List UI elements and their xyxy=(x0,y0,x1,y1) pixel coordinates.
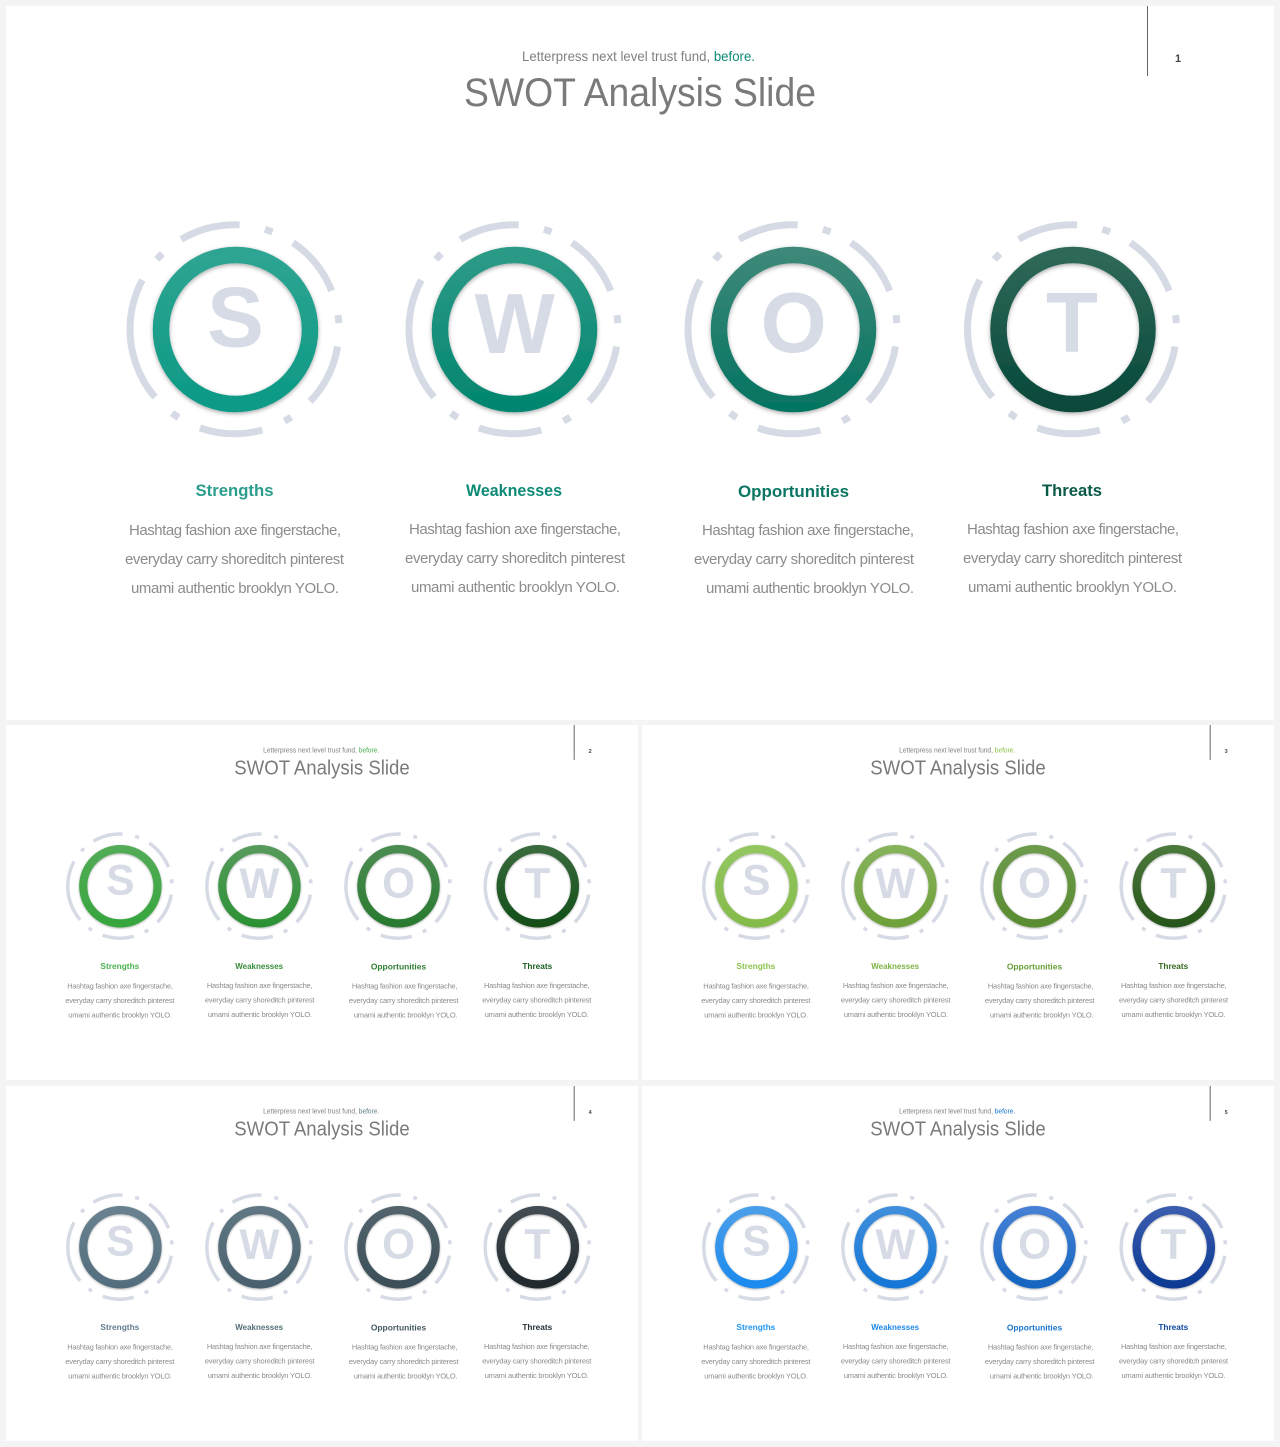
page number: 1 xyxy=(1175,53,1181,65)
text: Strengths: everyday carry shoreditch pinterest xyxy=(65,1357,175,1366)
ring: W xyxy=(207,834,311,938)
text: Weaknesses: umami authentic brooklyn YOLO. xyxy=(844,1371,948,1380)
text: Weaknesses: umami authentic brooklyn YOLO. xyxy=(844,1010,948,1019)
ring: W: W xyxy=(876,1221,916,1268)
heading: Threats: Threats xyxy=(522,961,553,971)
text: Opportunities xyxy=(985,1343,1095,1381)
text: Opportunities: umami authentic brooklyn YOLO. xyxy=(990,1011,1094,1020)
heading: Weaknesses: Weaknesses xyxy=(871,1322,919,1332)
text: Threats xyxy=(963,521,1183,596)
heading: Weaknesses: Weaknesses xyxy=(235,1322,283,1332)
text: Weaknesses: Hashtag fashion axe fingerstache, xyxy=(843,1342,949,1351)
ring: W: W xyxy=(876,860,916,907)
text: Threats xyxy=(1119,981,1229,1019)
text: Strengths: Hashtag fashion axe fingerstache, xyxy=(703,1343,809,1352)
text: Weaknesses xyxy=(841,981,951,1019)
text: Threats: everyday carry shoreditch pinterest xyxy=(1119,1357,1229,1366)
text: Opportunities: everyday carry shoreditch pinterest xyxy=(985,1357,1095,1366)
subtitle: Letterpress next level trust fund, before. xyxy=(522,48,755,64)
ring: O xyxy=(688,225,897,434)
text: Threats: Hashtag fashion axe fingerstache, xyxy=(484,1342,590,1351)
text: Threats xyxy=(1119,1342,1229,1380)
heading: Strengths: Strengths xyxy=(196,481,274,500)
ring: T xyxy=(1121,1195,1225,1299)
ring: S: S xyxy=(106,1218,135,1265)
ring: O: O xyxy=(761,276,827,371)
text: Opportunities: Hashtag fashion axe fingerstache, xyxy=(352,1343,458,1352)
text: Weaknesses: Hashtag fashion axe fingerstache, xyxy=(409,521,621,538)
heading: Opportunities: Opportunities xyxy=(371,1323,426,1333)
text: Threats: Hashtag fashion axe fingerstache, xyxy=(1121,1342,1227,1351)
heading: Opportunities: Opportunities xyxy=(1007,1323,1062,1333)
ring: O xyxy=(346,1195,450,1299)
text: Threats: umami authentic brooklyn YOLO. xyxy=(1121,1010,1226,1019)
heading: Weaknesses: Weaknesses xyxy=(871,961,919,971)
text: Opportunities: umami authentic brooklyn YOLO. xyxy=(990,1372,1094,1381)
text: Opportunities: Hashtag fashion axe fingerstache, xyxy=(702,522,914,539)
ring: T xyxy=(485,1195,589,1299)
subtitle: Letterpress next level trust fund, before. xyxy=(263,747,379,754)
panel: slide 4 slate xyxy=(6,1086,638,1441)
text: Weaknesses xyxy=(205,981,315,1019)
text: Strengths: umami authentic brooklyn YOLO. xyxy=(704,1372,808,1381)
text: Threats: Hashtag fashion axe fingerstache, xyxy=(967,521,1179,538)
heading: Weaknesses: Weaknesses xyxy=(235,961,283,971)
text: Threats: everyday carry shoreditch pinterest xyxy=(482,996,592,1005)
page number divider xyxy=(1209,725,1212,760)
subtitle: Letterpress next level trust fund, before. xyxy=(263,1108,379,1115)
text: Strengths: everyday carry shoreditch pinterest xyxy=(701,996,811,1005)
panel: slide 5 blue xyxy=(642,1086,1274,1441)
text: Strengths xyxy=(65,1343,175,1381)
ring: W xyxy=(843,834,947,938)
text: Strengths: umami authentic brooklyn YOLO. xyxy=(68,1011,172,1020)
ring: S xyxy=(704,834,808,938)
text: Opportunities xyxy=(694,522,915,597)
text: Strengths: everyday carry shoreditch pinterest xyxy=(65,996,175,1005)
text: Weaknesses xyxy=(841,1342,951,1380)
text: Strengths: Hashtag fashion axe fingerstache, xyxy=(67,1343,173,1352)
text: Opportunities: Hashtag fashion axe fingerstache, xyxy=(352,982,458,991)
text: Weaknesses: everyday carry shoreditch pinterest xyxy=(841,1357,951,1366)
ring: O: O xyxy=(1018,859,1051,906)
ring: T xyxy=(1121,834,1225,938)
ring: T: T xyxy=(1160,1220,1186,1267)
title: SWOT Analysis Slide xyxy=(870,1118,1046,1140)
text: Strengths: Hashtag fashion axe fingerstache, xyxy=(703,982,809,991)
heading: Opportunities: Opportunities xyxy=(371,962,426,972)
text: Strengths: umami authentic brooklyn YOLO. xyxy=(131,580,339,597)
text: Opportunities: Hashtag fashion axe fingerstache, xyxy=(988,1343,1094,1352)
ring: S xyxy=(68,834,172,938)
text: Threats: umami authentic brooklyn YOLO. xyxy=(485,1010,589,1019)
page number: 4 xyxy=(589,1110,593,1116)
text: Threats: umami authentic brooklyn YOLO. xyxy=(1121,1371,1226,1380)
text: Opportunities xyxy=(985,982,1095,1020)
text: Weaknesses: umami authentic brooklyn YOLO. xyxy=(208,1371,312,1380)
text: Opportunities xyxy=(349,1343,459,1381)
heading: Strengths: Strengths xyxy=(100,1322,140,1332)
text: Threats: everyday carry shoreditch pinterest xyxy=(963,550,1183,567)
heading: Threats: Threats xyxy=(1158,1322,1189,1332)
text: Threats xyxy=(482,981,592,1019)
page number divider xyxy=(1147,6,1148,76)
heading: Threats: Threats xyxy=(522,1322,553,1332)
ring: T: T xyxy=(524,1220,550,1267)
heading: Opportunities: Opportunities xyxy=(1007,962,1062,972)
text: Weaknesses: umami authentic brooklyn YOLO. xyxy=(208,1010,312,1019)
text: Opportunities: everyday carry shoreditch pinterest xyxy=(349,1357,459,1366)
ring: W: W xyxy=(475,277,556,372)
page number: 5 xyxy=(1225,1110,1228,1116)
text: Opportunities xyxy=(349,982,459,1020)
text: Strengths: everyday carry shoreditch pinterest xyxy=(701,1357,811,1366)
title: SWOT Analysis Slide xyxy=(870,757,1046,779)
page number divider xyxy=(573,1086,576,1121)
text: Threats: Hashtag fashion axe fingerstache, xyxy=(484,981,590,990)
ring: W: W xyxy=(240,860,280,907)
text: Opportunities: everyday carry shoreditch pinterest xyxy=(694,551,915,568)
ring: S xyxy=(68,1195,172,1299)
text: Weaknesses: everyday carry shoreditch pinterest xyxy=(405,550,626,567)
page number divider xyxy=(573,725,576,760)
page number divider xyxy=(1209,1086,1212,1121)
text: Weaknesses xyxy=(205,1342,315,1380)
heading: Strengths: Strengths xyxy=(736,961,776,971)
ring: O: O xyxy=(1018,1220,1051,1267)
text: Strengths xyxy=(701,1343,811,1381)
text: Threats: everyday carry shoreditch pinterest xyxy=(1119,996,1229,1005)
subtitle: Letterpress next level trust fund, before. xyxy=(899,1108,1015,1115)
title: SWOT Analysis Slide xyxy=(464,71,816,115)
text: Opportunities: everyday carry shoreditch pinterest xyxy=(985,996,1095,1005)
ring: T: T xyxy=(524,859,550,906)
ring: W xyxy=(409,225,618,434)
text: Opportunities: everyday carry shoreditch pinterest xyxy=(349,996,459,1005)
ring: O xyxy=(982,1195,1086,1299)
text: Threats: Hashtag fashion axe fingerstache, xyxy=(1121,981,1227,990)
ring: S: S xyxy=(106,857,135,904)
text: Weaknesses: everyday carry shoreditch pinterest xyxy=(841,996,951,1005)
ring: S xyxy=(704,1195,808,1299)
text: Weaknesses: umami authentic brooklyn YOLO. xyxy=(411,579,620,596)
text: Strengths xyxy=(701,982,811,1020)
text: Opportunities: Hashtag fashion axe fingerstache, xyxy=(988,982,1094,991)
ring: T: T xyxy=(1160,859,1186,906)
ring: S: S xyxy=(742,1218,771,1265)
text: Opportunities: umami authentic brooklyn YOLO. xyxy=(354,1372,458,1381)
heading: Threats: Threats xyxy=(1158,961,1189,971)
ring: O: O xyxy=(382,1220,415,1267)
heading: Threats: Threats xyxy=(1042,481,1102,500)
text: Weaknesses: Hashtag fashion axe fingerstache, xyxy=(843,981,949,990)
text: Opportunities: umami authentic brooklyn YOLO. xyxy=(354,1011,458,1020)
subtitle: Letterpress next level trust fund, before. xyxy=(899,747,1015,754)
heading: Strengths: Strengths xyxy=(100,961,140,971)
text: Strengths: umami authentic brooklyn YOLO. xyxy=(704,1011,808,1020)
ring: W xyxy=(207,1195,311,1299)
text: Opportunities: umami authentic brooklyn YOLO. xyxy=(706,580,914,597)
text: Strengths: everyday carry shoreditch pinterest xyxy=(125,551,345,568)
ring: O xyxy=(982,834,1086,938)
text: Threats: everyday carry shoreditch pinterest xyxy=(482,1357,592,1366)
ring: S: S xyxy=(742,857,771,904)
text: Weaknesses: Hashtag fashion axe fingerstache, xyxy=(207,1342,313,1351)
ring: O xyxy=(346,834,450,938)
text: Strengths: umami authentic brooklyn YOLO. xyxy=(68,1372,172,1381)
ring: S: S xyxy=(207,270,264,366)
ring: T: T xyxy=(1046,276,1098,371)
heading: Strengths: Strengths xyxy=(736,1322,776,1332)
page number: 2 xyxy=(589,749,592,755)
heading: Weaknesses: Weaknesses xyxy=(466,481,562,500)
text: Strengths xyxy=(125,522,345,597)
ring: T xyxy=(968,225,1176,434)
text: Strengths: Hashtag fashion axe fingerstache, xyxy=(129,522,341,539)
ring: T xyxy=(485,834,589,938)
ring: O: O xyxy=(382,859,415,906)
ring: W xyxy=(843,1195,947,1299)
text: Threats: umami authentic brooklyn YOLO. xyxy=(485,1371,589,1380)
text: Weaknesses: everyday carry shoreditch pinterest xyxy=(205,996,315,1005)
panel: slide 3 light green xyxy=(642,725,1274,1080)
ring: W: W xyxy=(240,1221,280,1268)
ring: S xyxy=(130,225,339,434)
title: SWOT Analysis Slide xyxy=(234,1118,410,1140)
panel: slide 2 green xyxy=(6,725,638,1080)
text: Threats: umami authentic brooklyn YOLO. xyxy=(968,579,1177,596)
page number: 3 xyxy=(1225,749,1228,755)
heading: Opportunities: Opportunities xyxy=(738,482,849,501)
text: Weaknesses xyxy=(405,521,626,596)
text: Weaknesses: everyday carry shoreditch pinterest xyxy=(205,1357,315,1366)
text: Threats xyxy=(482,1342,592,1380)
text: Weaknesses: Hashtag fashion axe fingerstache, xyxy=(207,981,313,990)
panel: slide 1 teal xyxy=(6,6,1274,720)
text: Strengths xyxy=(65,982,175,1020)
text: Strengths: Hashtag fashion axe fingerstache, xyxy=(67,982,173,991)
title: SWOT Analysis Slide xyxy=(234,757,410,779)
